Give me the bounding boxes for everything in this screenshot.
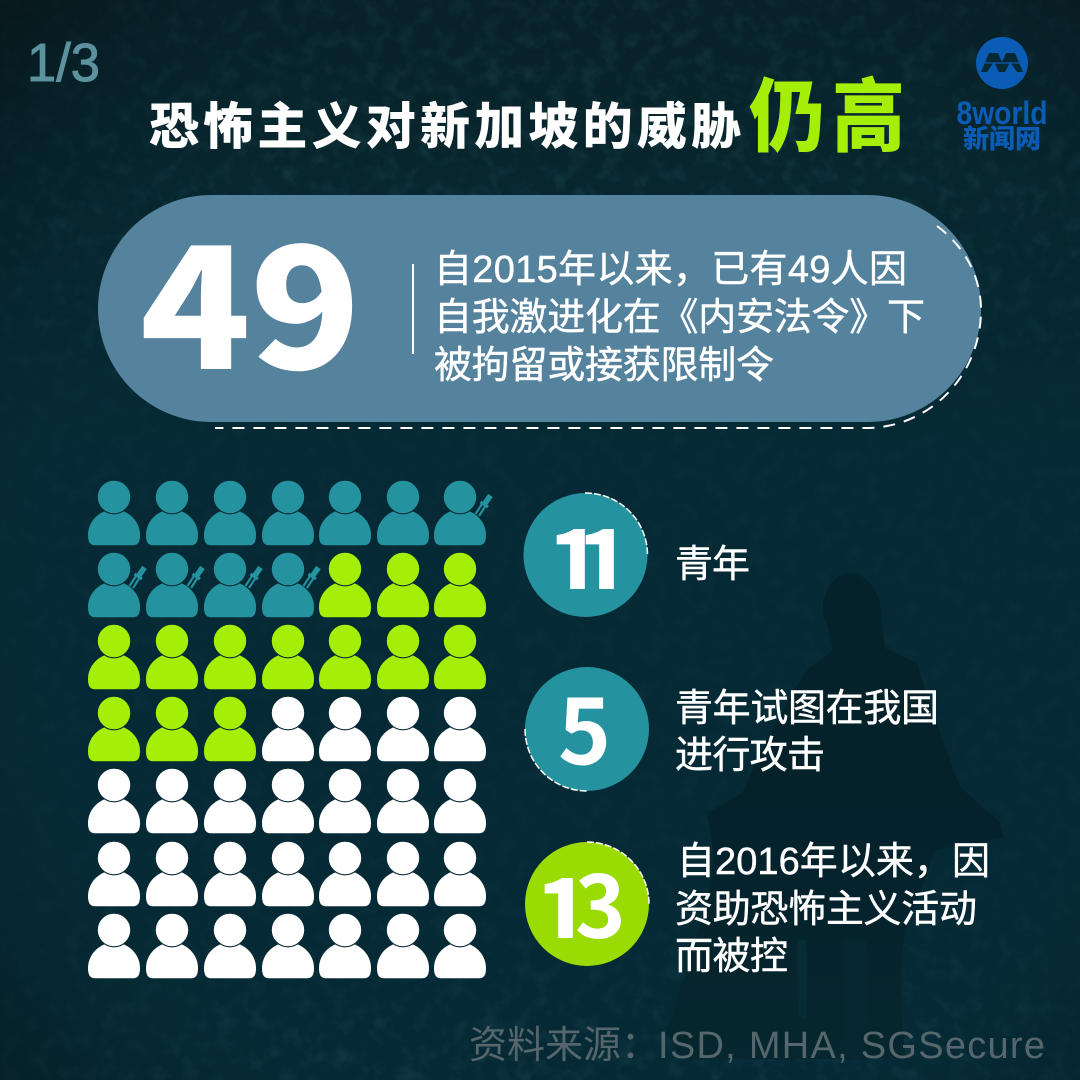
stat: 13: 资助恐怖主义活动 [675, 889, 977, 931]
lime people [88, 552, 486, 761]
stat: 13: 而被控 [675, 936, 788, 978]
stat: 13 [525, 836, 990, 981]
title highlight: 高 [832, 73, 905, 162]
stat description [434, 249, 925, 387]
stat description: 自我激进化在《内安法令》下 [434, 297, 925, 339]
pictogram: 49 people [88, 480, 490, 978]
stat: 5: 进行攻击 [675, 735, 825, 777]
stat description: 自2015年以来，已有49人因 [434, 249, 907, 291]
page number: 1/3 [27, 33, 100, 93]
stat: 13: 1 [534, 836, 593, 981]
soldier silhouette [667, 573, 1004, 1060]
stat: 11: 青年 [675, 544, 750, 586]
stat description: 被拘留或接获限制令 [434, 345, 774, 387]
stat: 5 [525, 660, 939, 791]
gap between legs [843, 940, 870, 1060]
logo: 8world: 8world [956, 95, 1048, 131]
stat: 11 [524, 492, 748, 617]
source: ISD, MHA, SGSecure [658, 1025, 1045, 1067]
stat: 13: 自2016年以来，因 [677, 841, 990, 883]
row 2: teal with weapon [88, 552, 318, 617]
stat: 13: 3 [575, 838, 626, 963]
title highlight: 仍 [749, 73, 825, 162]
divider [412, 264, 414, 354]
logo: 8world [956, 37, 1048, 154]
dashed outline [215, 226, 981, 428]
big number 49: 49 [140, 178, 361, 418]
stat: 11: 11 [546, 487, 634, 632]
panel: 49 headline stat [98, 178, 981, 428]
logo: 8world: 新闻网 [963, 124, 1041, 154]
stat: 5: 青年试图在我国 [675, 688, 939, 730]
white people [88, 696, 486, 978]
stat: 5: 5 [558, 660, 611, 790]
row 1: teal [88, 480, 490, 545]
source [469, 1025, 1045, 1067]
title [149, 73, 905, 162]
title: 恐怖主义对新加坡的威胁 [149, 99, 741, 155]
source: 资料来源： [469, 1025, 659, 1067]
